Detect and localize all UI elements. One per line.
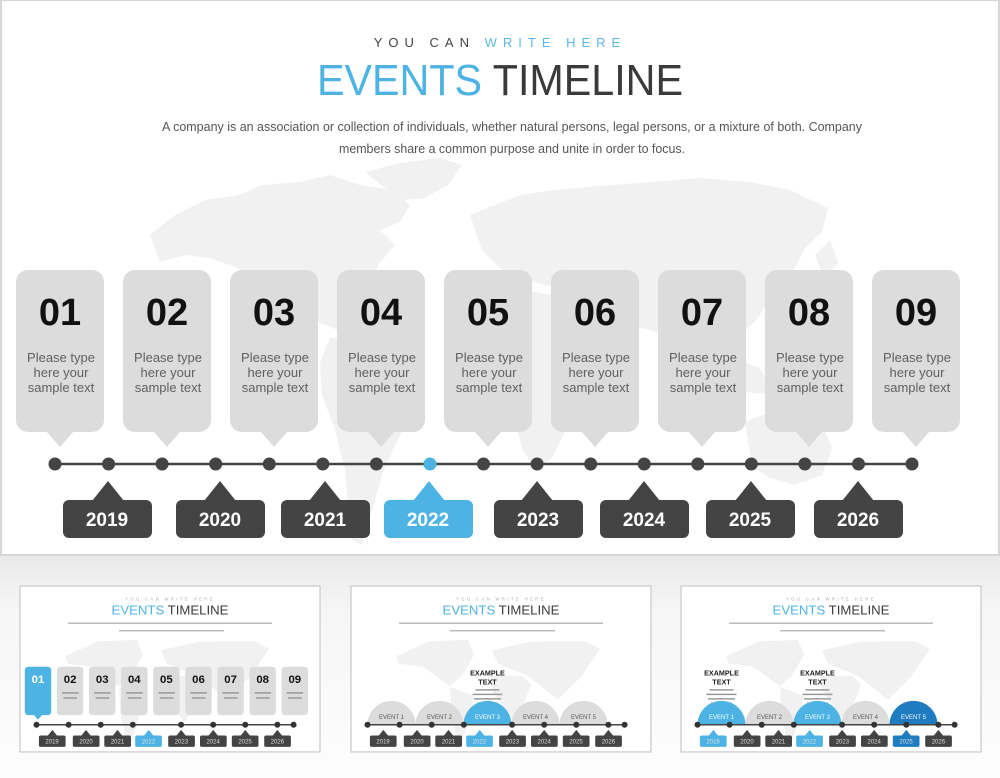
year labels: 2026: [837, 510, 879, 531]
cards: here your: [676, 365, 731, 380]
year labels: 2022: [407, 510, 449, 531]
thumbnail 3: YOU CAN WRITE HERE: [786, 596, 876, 601]
cards: here your: [355, 365, 410, 380]
thumbnail 2: EVENT 4: [523, 715, 549, 721]
cards: here your: [34, 365, 89, 380]
thumbnail 2: EVENT 3: [475, 715, 501, 721]
cards: 06: [574, 292, 616, 334]
cards: Please type: [776, 350, 844, 365]
thumbnail 3: EVENT 5: [901, 715, 927, 721]
cards: Please type: [27, 350, 95, 365]
thumbnail 3: TEXT: [808, 679, 827, 687]
title: EVENTS TIMELINE: [317, 56, 683, 105]
thumbnail 2: EVENT 1: [379, 715, 405, 721]
thumbnail 2: 2020: [410, 739, 424, 745]
year labels: 2020: [199, 510, 241, 531]
thumbnail 1: 2026: [271, 739, 285, 745]
thumbnail 3: 2024: [868, 739, 882, 745]
thumbnail 1: 06: [192, 674, 205, 686]
thumbnail 2: [351, 586, 651, 752]
cards: sample text: [456, 380, 523, 395]
cards: 05: [467, 292, 509, 334]
cards: 03: [253, 292, 295, 334]
thumbnail 3: 2022: [803, 739, 817, 745]
thumbnail 2: 2021: [442, 739, 456, 745]
cards: sample text: [884, 380, 951, 395]
thumbnail 3: EVENT 3: [805, 715, 831, 721]
year labels: [63, 481, 903, 538]
thumbnail 3: EVENTS TIMELINE: [773, 602, 890, 617]
cards: here your: [783, 365, 838, 380]
year labels: 2019: [86, 510, 128, 531]
thumbnail 2: 2019: [376, 739, 390, 745]
cards: here your: [890, 365, 945, 380]
thumbnail 1: [20, 586, 320, 752]
cards: here your: [141, 365, 196, 380]
thumbnail 1: 01: [32, 674, 45, 686]
cards: Please type: [883, 350, 951, 365]
cards: here your: [462, 365, 517, 380]
thumbnail 1: 2019: [45, 739, 59, 745]
cards: 01: [39, 292, 81, 334]
thumbnail 1: 2025: [238, 739, 252, 745]
thumbnail 2: 2023: [506, 739, 520, 745]
thumbnail 3: 2019: [706, 739, 720, 745]
cards: Please type: [562, 350, 630, 365]
thumbnail 2: 2022: [473, 739, 487, 745]
thumbnail 3: EVENT 4: [853, 715, 879, 721]
world map background: [150, 158, 838, 545]
cards: sample text: [670, 380, 737, 395]
cards: Please type: [241, 350, 309, 365]
cards: sample text: [28, 380, 95, 395]
thumbnail 1: 02: [64, 674, 76, 686]
thumbnail 2: 2024: [538, 739, 552, 745]
cards: Please type: [348, 350, 416, 365]
main slide: [1, 0, 999, 555]
thumbnail 3: EXAMPLE: [800, 670, 835, 678]
thumbnail 1: 07: [224, 674, 237, 686]
thumbnail 2: EVENT 2: [427, 715, 453, 721]
thumbnail 1: 2023: [175, 739, 189, 745]
thumbnail 3: [681, 586, 981, 752]
cards: 07: [681, 292, 723, 334]
timeline: [48, 458, 918, 470]
cards: sample text: [242, 380, 309, 395]
thumbnail 2: EVENT 5: [571, 715, 597, 721]
thumbnail 3: TEXT: [712, 679, 731, 687]
description: [162, 119, 862, 156]
subtitle: YOU CAN WRITE HERE: [374, 35, 626, 50]
description: A company is an association or collection of individuals, whether natural persons, legal persons, or a mixture of both. Company: [162, 119, 862, 134]
cards: 08: [788, 292, 830, 334]
thumbnail 3: EVENT 1: [709, 715, 735, 721]
cards: here your: [569, 365, 624, 380]
thumbnail 3: 2023: [836, 739, 850, 745]
cards: Please type: [455, 350, 523, 365]
thumbnail 1: 2024: [207, 739, 221, 745]
cards: Please type: [669, 350, 737, 365]
cards: here your: [248, 365, 303, 380]
thumbnail 3: 2025: [899, 739, 913, 745]
cards: Please type: [134, 350, 202, 365]
thumbnail 3: 2026: [932, 739, 946, 745]
thumbnail 2: EVENTS TIMELINE: [443, 602, 560, 617]
thumbnail 1: 04: [128, 674, 141, 686]
thumbnail 1: YOU CAN WRITE HERE: [125, 596, 215, 601]
thumbnail 1: 05: [160, 674, 173, 686]
cards: sample text: [563, 380, 630, 395]
cards: [16, 270, 960, 447]
year labels: 2023: [517, 510, 559, 531]
thumbnail 2: YOU CAN WRITE HERE: [456, 596, 546, 601]
thumbnail 2: 2025: [569, 739, 583, 745]
thumbnail 2: 2026: [602, 739, 616, 745]
year labels: 2024: [623, 510, 666, 531]
thumbnail 1: 2022: [142, 739, 156, 745]
year labels: 2021: [304, 510, 347, 531]
description: members share a common purpose and unite in order to focus.: [339, 141, 685, 156]
cards: sample text: [135, 380, 202, 395]
year labels: 2025: [729, 510, 772, 531]
thumbnail 1: 2021: [111, 739, 125, 745]
thumbnail 2: EXAMPLE: [470, 670, 505, 678]
thumbnail 3: EXAMPLE: [704, 670, 739, 678]
cards: sample text: [777, 380, 844, 395]
cards: 09: [895, 292, 937, 334]
thumbnail 1: EVENTS TIMELINE: [112, 602, 229, 617]
thumbnail 3: 2020: [740, 739, 754, 745]
thumbnail 3: 2021: [772, 739, 786, 745]
cards: 04: [360, 292, 402, 334]
thumbnail 1: 2020: [79, 739, 93, 745]
thumbnail 1: 09: [288, 674, 301, 686]
thumbnail 3: EVENT 2: [757, 715, 783, 721]
thumbnail 1: 03: [96, 674, 109, 686]
thumbnail 2: TEXT: [478, 679, 497, 687]
cards: 02: [146, 292, 188, 334]
thumbnail 1: 08: [256, 674, 269, 686]
cards: sample text: [349, 380, 416, 395]
